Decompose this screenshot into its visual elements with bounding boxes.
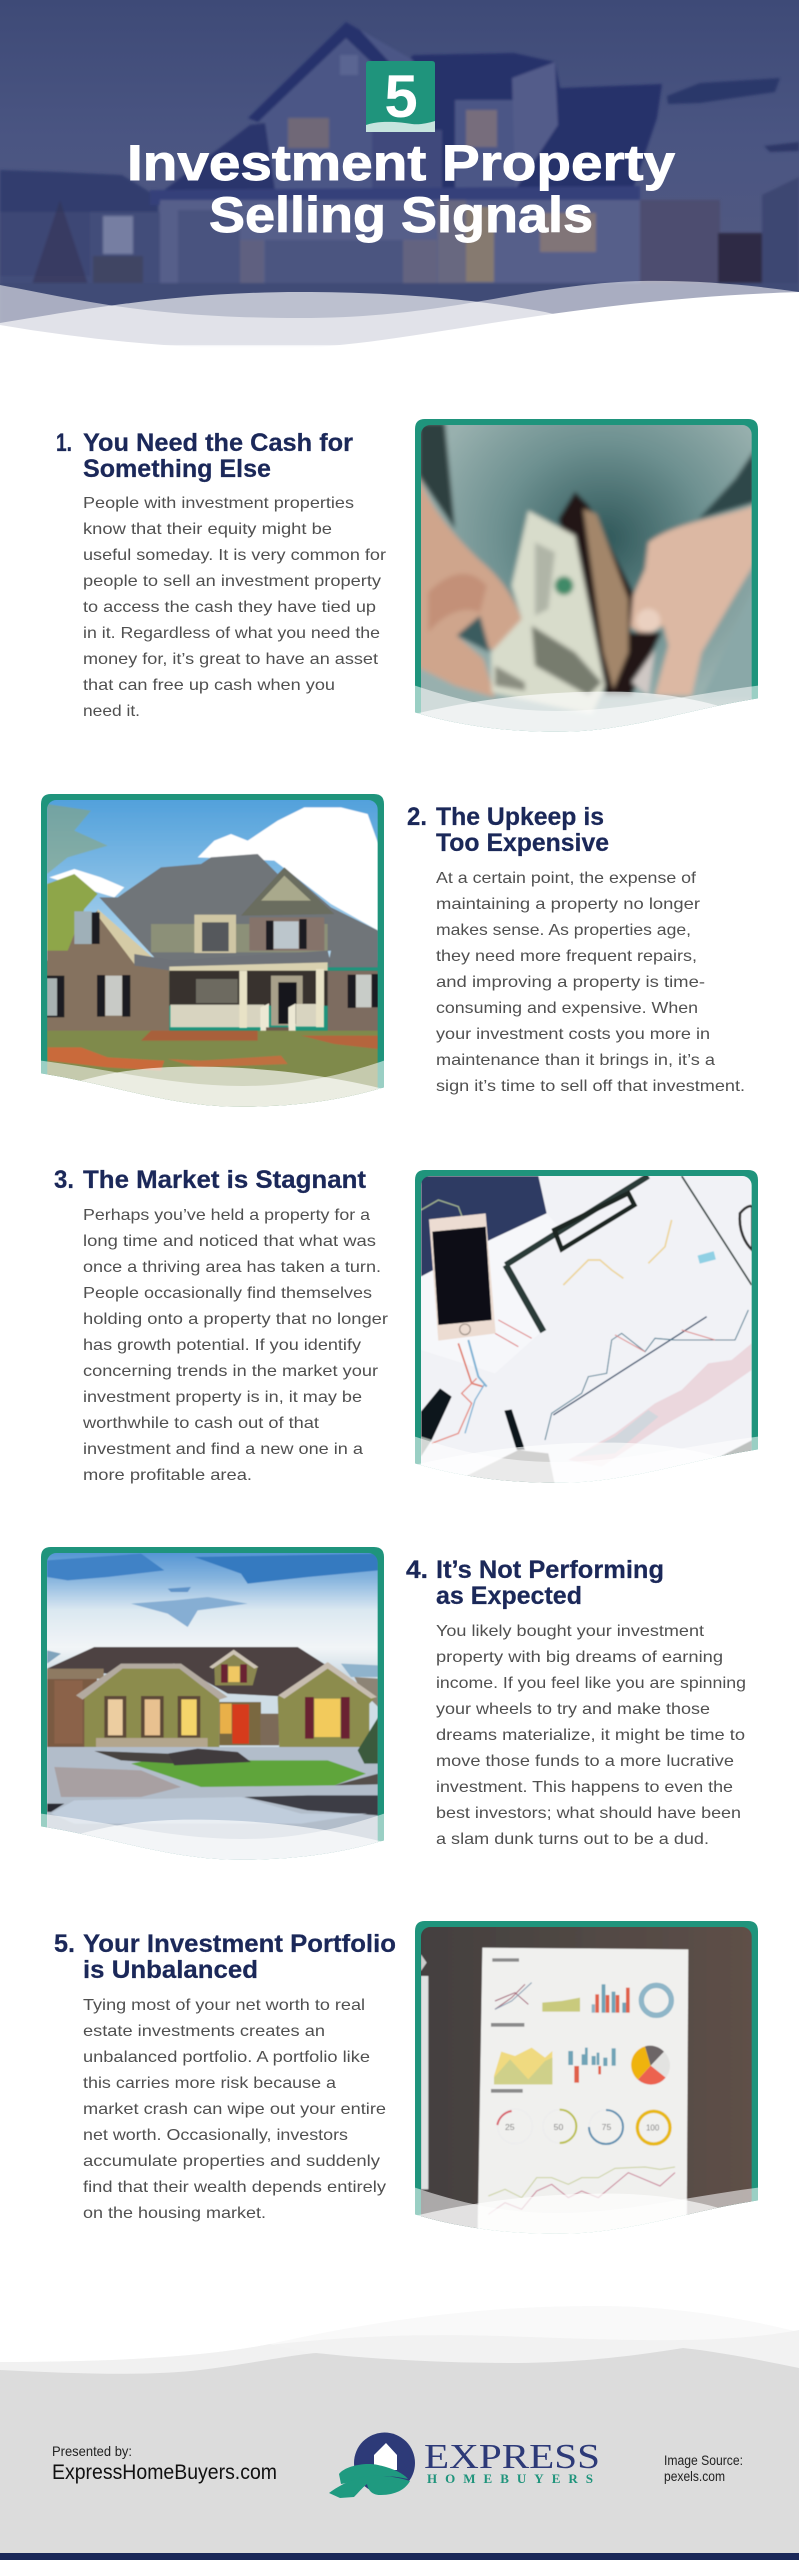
body 4: You likely bought your investment [436, 1623, 705, 1640]
body 1: People with investment properties [83, 495, 354, 512]
photo card 1: hands holding wallet [415, 419, 758, 734]
photo card 5: chart report on dark surface: 75 [602, 2122, 611, 2132]
body 2: consuming and expensive. When [436, 1000, 698, 1017]
heading 4 [406, 1556, 664, 1610]
body 5: this carries more risk because a [83, 2075, 336, 2092]
body 3: worthwhile to cash out of that [82, 1415, 320, 1432]
panel: signal 1 text [56, 429, 387, 720]
body 5: estate investments creates an [83, 2023, 325, 2040]
body 2: your investment costs you more in [436, 1026, 710, 1043]
body 1 [83, 495, 387, 720]
wave overlays [0, 281, 799, 365]
body 2: sign it’s time to sell off that investment. [436, 1078, 745, 1095]
body 2: maintenance than it brings in, it’s a [436, 1052, 715, 1069]
body 1: to access the cash they have tied up [83, 599, 376, 616]
body 4 [436, 1623, 746, 1848]
footer waves and background [0, 2306, 799, 2560]
header photo: house at dusk [0, 22, 799, 345]
body 3: investment and find a new one in a [83, 1441, 363, 1458]
heading 4: as Expected [436, 1582, 582, 1610]
logo: Express Homebuyers: HOMEBUYERS [427, 2471, 593, 2486]
body 3: long time and noticed that what was [83, 1233, 376, 1250]
wave overlay [415, 1437, 758, 1485]
body 1: people to sell an investment property [83, 573, 381, 590]
body 1: know that their equity might be [83, 521, 332, 538]
heading 4: It’s Not Performing [436, 1556, 664, 1584]
body 2 [436, 870, 745, 1095]
logo: Express Homebuyers [329, 2432, 600, 2498]
body 5 [83, 1997, 386, 2222]
body 4: your wheels to try and make those [436, 1701, 710, 1718]
photo card 2: brick house [41, 794, 384, 1109]
panel: signal 5 text [54, 1930, 396, 2222]
presented by: Presented by: [52, 2443, 132, 2459]
photo card 5: chart report on dark surface: 100 [646, 2123, 660, 2132]
image source: Image Source: [664, 2453, 743, 2468]
presented by [52, 2443, 277, 2484]
body 4: income. If you feel like you are spinning [436, 1675, 746, 1692]
body 2: they need more frequent repairs, [436, 948, 697, 965]
logo: Express Homebuyers: EXPRESS [424, 2437, 600, 2476]
photo card 5: chart report on dark surface: 25 [505, 2122, 515, 2132]
badge: number 5 [366, 61, 435, 132]
body 5: find that their wealth depends entirely [83, 2179, 386, 2196]
body 3: Perhaps you’ve held a property for a [83, 1207, 370, 1224]
photo card 4: green stucco house [41, 1547, 384, 1862]
panel: signal 2 text [407, 803, 745, 1095]
title: Selling Signals [209, 187, 593, 243]
wave overlay [41, 1814, 384, 1862]
body 5: unbalanced portfolio. A portfolio like [83, 2049, 370, 2066]
body 3: investment property is in, it may be [83, 1389, 362, 1406]
heading 3: The Market is Stagnant [83, 1166, 367, 1194]
badge: number 5: 5 [384, 63, 418, 130]
header sky [0, 0, 799, 345]
heading 2: The Upkeep is [436, 803, 604, 831]
heading 4: 4. [406, 1556, 428, 1584]
body 1: that can free up cash when you [83, 677, 335, 694]
heading 5 [54, 1930, 396, 1984]
body 5: on the housing market. [83, 2205, 266, 2222]
body 3: People occasionally find themselves [83, 1285, 372, 1302]
body 5: net worth. Occasionally, investors [83, 2127, 348, 2144]
body 2: makes sense. As properties age, [436, 922, 691, 939]
wave overlay [415, 686, 758, 734]
body 3: has growth potential. If you identify [83, 1337, 361, 1354]
panel: signal 4 text [406, 1556, 746, 1848]
body 4: a slam dunk turns out to be a dud. [436, 1831, 709, 1848]
body 3 [82, 1207, 389, 1484]
heading 1: You Need the Cash for [83, 429, 353, 457]
heading 1: Something Else [83, 455, 271, 483]
photo card 5: chart report on dark surface [415, 1921, 758, 2236]
heading 3: 3. [54, 1166, 74, 1194]
body 3: concerning trends in the market your [83, 1363, 379, 1380]
body 3: more profitable area. [83, 1467, 252, 1484]
heading 2 [407, 803, 609, 857]
body 1: need it. [83, 703, 140, 720]
photo card 5: chart report on dark surface: 50 [554, 2122, 563, 2132]
photo card 3: phone and stock charts on clipboard [415, 1170, 758, 1485]
body 5: Tying most of your net worth to real [83, 1997, 365, 2014]
panel: signal 3 text [54, 1166, 389, 1484]
heading 1: 1. [56, 429, 72, 457]
body 3: once a thriving area has taken a turn. [83, 1259, 381, 1276]
header banner [0, 0, 799, 365]
body 1: in it. Regardless of what you need the [83, 625, 380, 642]
body 4: best investors; what should have been [436, 1805, 741, 1822]
body 3: holding onto a property that no longer [83, 1311, 389, 1328]
body 2: maintaining a property no longer [436, 896, 701, 913]
heading 5: is Unbalanced [83, 1956, 258, 1984]
body 4: dreams materialize, it might be time to [436, 1727, 745, 1744]
heading 1 [56, 429, 353, 483]
wave overlay [41, 1061, 384, 1109]
body 4: property with big dreams of earning [436, 1649, 723, 1666]
image source: pexels.com [664, 2469, 725, 2484]
heading 5: Your Investment Portfolio [83, 1930, 396, 1958]
heading 2: 2. [407, 803, 427, 831]
body 1: money for, it’s great to have an asset [83, 651, 379, 668]
title: Investment Property [127, 135, 675, 191]
body 4: move those funds to a more lucrative [436, 1753, 734, 1770]
body 1: useful someday. It is very common for [83, 547, 387, 564]
body 5: market crash can wipe out your entire [83, 2101, 386, 2118]
presented by: ExpressHomeBuyers.com [52, 2461, 277, 2484]
heading 2: Too Expensive [436, 829, 609, 857]
body 2: and improving a property is time- [436, 974, 705, 991]
heading 5: 5. [54, 1930, 75, 1958]
body 4: investment. This happens to even the [436, 1779, 733, 1796]
body 2: At a certain point, the expense of [436, 870, 697, 887]
title [127, 135, 675, 243]
footer [0, 2306, 799, 2560]
body 5: accumulate properties and suddenly [83, 2153, 380, 2170]
image source [664, 2453, 743, 2484]
wave overlay [415, 2188, 758, 2236]
